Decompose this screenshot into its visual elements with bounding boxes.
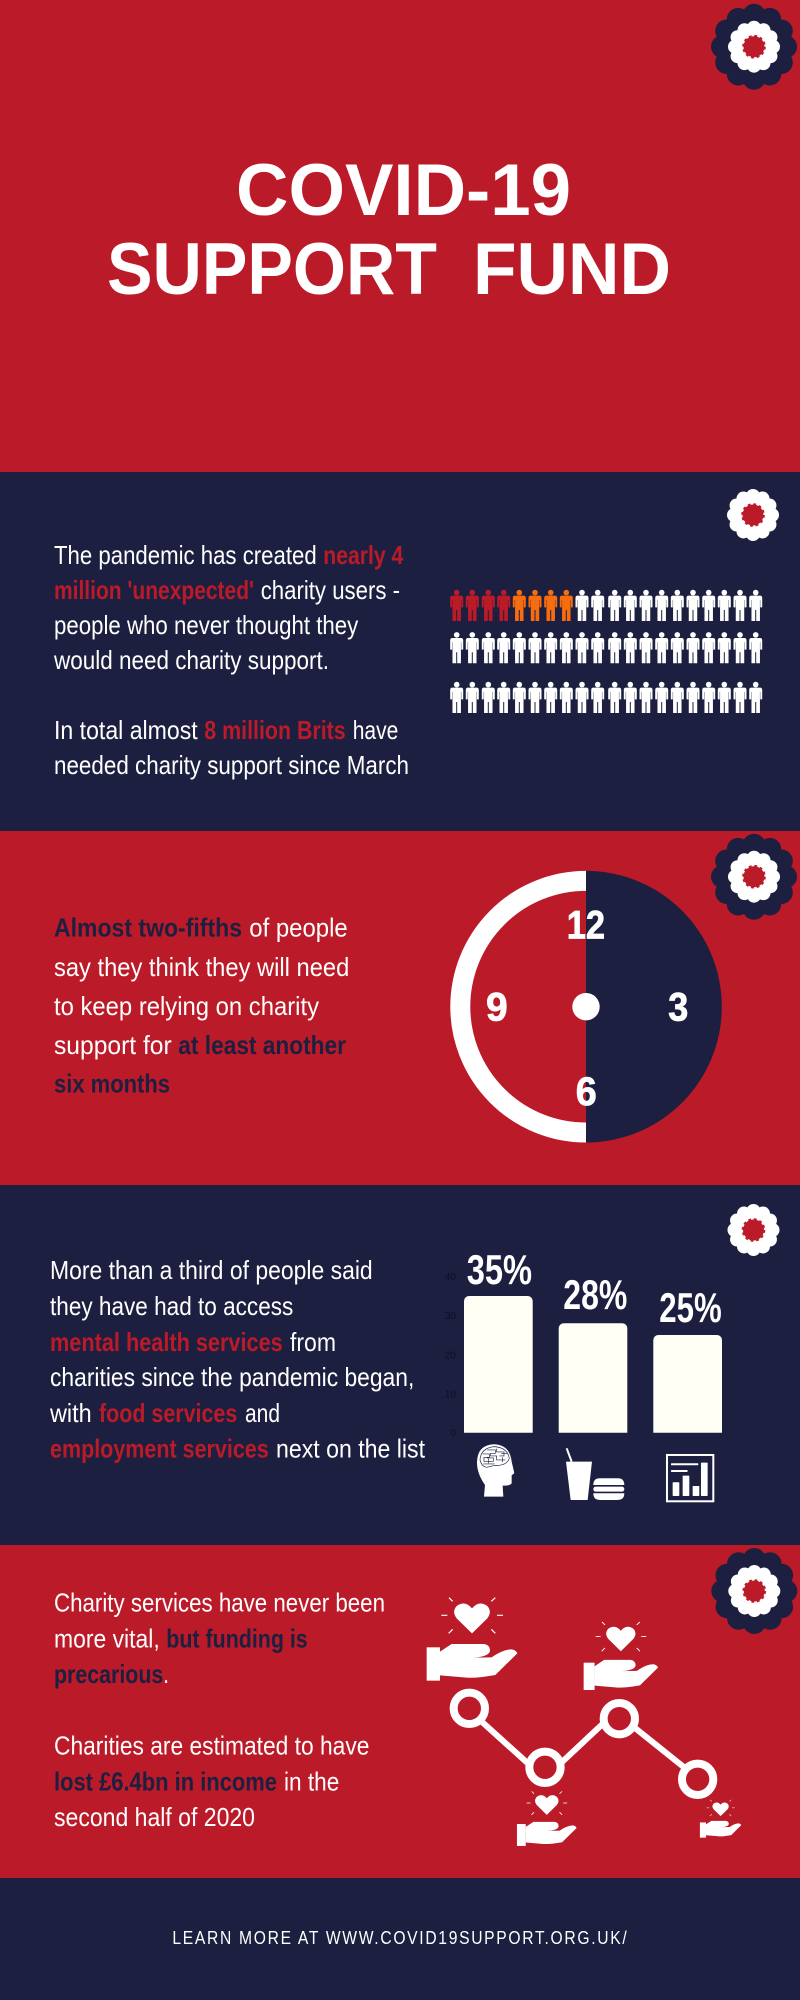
text block: unexpected users: million 'unexpected' [54, 575, 254, 605]
text block: funding: precarious [54, 1659, 163, 1689]
text block: two-fifths: of people [249, 913, 348, 943]
text block: funding: Charities are estimated to have [54, 1730, 369, 1760]
text block: services: with [49, 1398, 92, 1428]
text block: services [49, 1255, 426, 1464]
text block: funding: second half of 2020 [54, 1802, 255, 1832]
text block: services: from [290, 1327, 336, 1357]
text block: unexpected users: The pandemic has created [54, 540, 317, 570]
text block: services: mental health services [50, 1327, 283, 1357]
text block: unexpected users: have [353, 715, 398, 745]
text block: funding: more vital, [54, 1624, 160, 1654]
text block: unexpected users: 8 million Brits [204, 715, 346, 745]
bar chart [445, 1246, 722, 1439]
text block: funding: but funding is [166, 1624, 308, 1654]
text block: services: and [245, 1398, 280, 1428]
clock chart: 3 [668, 986, 688, 1030]
panel: services bar chart [0, 1185, 800, 1545]
text block: unexpected users: charity users - [261, 575, 400, 605]
title: FUND [473, 229, 671, 310]
icon: hand with heart second [584, 1622, 658, 1690]
pictogram: people rows [450, 590, 762, 713]
text block: funding [54, 1588, 385, 1832]
panel: funding [0, 1545, 800, 1878]
icon: report with bars [667, 1455, 713, 1501]
title [107, 150, 671, 310]
text block: unexpected users: needed charity support since March [54, 750, 409, 780]
title: COVID-19 [236, 150, 571, 231]
text block: services: charities since the pandemic began, [50, 1362, 414, 1392]
text block: services: food services [99, 1398, 237, 1428]
icon: head with brain [477, 1444, 514, 1497]
line chart with ring markers [454, 1693, 713, 1795]
clock chart: 9 [486, 986, 508, 1030]
icon: hand with heart third [517, 1791, 577, 1846]
clock chart [460, 871, 722, 1142]
text block: two-fifths: Almost two-fifths [54, 913, 242, 943]
text block: unexpected users: In total almost [54, 715, 198, 745]
text block: unexpected users [53, 540, 409, 780]
bar chart: 25% [659, 1284, 722, 1331]
panel: footer [0, 1878, 800, 2000]
text block: two-fifths: at least another [178, 1030, 346, 1060]
text block: two-fifths: six months [54, 1069, 170, 1099]
text block: services: More than a third of people said [50, 1255, 373, 1285]
text block: services: they have had to access [50, 1291, 293, 1321]
icon: flower section four [711, 1548, 797, 1634]
clock chart: 6 [576, 1070, 597, 1114]
bar chart: 0 [450, 1428, 456, 1439]
icon: flower section one [727, 489, 779, 541]
text block: two-fifths: say they think they will need [54, 952, 349, 982]
bar chart: 20 [445, 1350, 456, 1362]
text block: funding: . [163, 1659, 169, 1689]
panel: unexpected charity users [0, 472, 800, 831]
panel: two-fifths clock [0, 831, 800, 1185]
text block: funding: in the [284, 1767, 339, 1797]
text block: services: next on the list [276, 1434, 426, 1464]
bar chart: 28% [563, 1271, 627, 1318]
icon: drink and burger [566, 1448, 624, 1500]
icon: flower section two [711, 834, 797, 920]
text block: unexpected users: would need charity support. [53, 645, 329, 675]
text block: two-fifths: support for [54, 1030, 172, 1060]
text block: two-fifths: to keep relying on charity [54, 991, 319, 1021]
text block: funding: lost £6.4bn in income [54, 1767, 277, 1797]
text block: services: employment services [50, 1434, 269, 1464]
panel: title band [0, 0, 800, 472]
bar chart: 10 [445, 1390, 456, 1400]
text block: unexpected users: nearly 4 [323, 540, 404, 570]
text block: unexpected users: people who never thought they [54, 610, 358, 640]
icon: flower top [711, 4, 797, 90]
footer link: LEARN MORE AT WWW.COVID19SUPPORT.ORG.UK/ [172, 1927, 628, 1948]
clock chart: 12 [567, 903, 605, 947]
title: SUPPORT [107, 229, 437, 310]
icon: flower section three [728, 1204, 780, 1256]
icon: hand with heart large [427, 1598, 517, 1681]
text block: funding: Charity services have never been [54, 1588, 385, 1618]
bar chart: 35% [467, 1246, 532, 1293]
bar chart: 40 [445, 1272, 456, 1283]
text block: two-fifths [54, 913, 349, 1099]
icon: hand with heart small [700, 1800, 741, 1838]
bar chart: 30 [445, 1311, 456, 1322]
